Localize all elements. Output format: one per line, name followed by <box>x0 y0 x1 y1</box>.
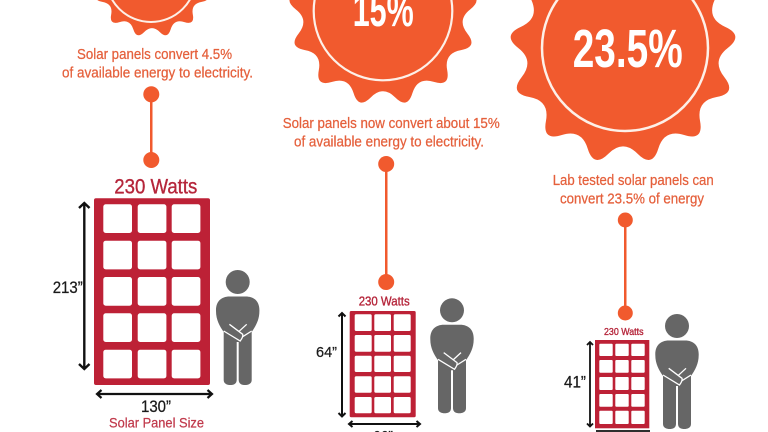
label: 213 inches: 213” <box>53 279 83 297</box>
arrow: width <box>596 430 650 432</box>
arrow: width <box>349 421 420 427</box>
icon: person <box>216 270 259 385</box>
heading: 230 Watts: 230 Watts <box>359 294 410 309</box>
heading: 230 Watts: 230 Watts <box>604 326 644 338</box>
column 1: 4.5% efficiency <box>53 0 259 431</box>
arrow: width <box>97 390 212 398</box>
badge: 23.5% starburst: 23.5% <box>573 19 683 79</box>
text: 15% description: Solar panels now convert about 15% <box>283 116 500 132</box>
text: 4.5% description: of available energy to electricity. <box>62 66 253 82</box>
text: 4.5% description: Solar panels convert 4.5% <box>77 47 232 63</box>
label: solar panel size: Solar Panel Size <box>109 415 204 431</box>
arrow: height <box>79 203 90 369</box>
icon: person <box>655 314 699 429</box>
text: 23.5% description: convert 23.5% of energy <box>560 191 705 207</box>
badge: 15% starburst <box>289 0 477 103</box>
text: 4.5% description <box>62 47 253 82</box>
connector: dots and line <box>378 156 394 290</box>
icon: person <box>430 298 474 413</box>
column 3: 23.5% efficiency <box>511 0 735 431</box>
badge: 23.5% starburst <box>511 0 735 160</box>
arrow: height <box>587 342 593 426</box>
arrow: height <box>338 313 346 416</box>
text: 15% description <box>283 116 500 151</box>
connector: dots and line <box>143 86 159 168</box>
heading: 230 Watts: 230 Watts <box>114 175 197 198</box>
text: 15% description: of available energy to electricity. <box>294 135 484 151</box>
column 2: 15% efficiency <box>283 0 500 432</box>
text: 23.5% description: Lab tested solar panels can <box>553 173 714 189</box>
solar panel: large <box>94 198 210 385</box>
label: 130 inches: 130” <box>141 398 171 416</box>
badge: 4.5% starburst <box>92 0 212 35</box>
connector: dots and line <box>618 212 633 320</box>
solar panel: medium <box>350 311 416 417</box>
solar panel: small <box>595 340 649 428</box>
text: 23.5% description <box>553 173 714 207</box>
label: 64 inches: 64” <box>316 344 337 361</box>
label: 41 inches: 41” <box>564 372 586 391</box>
